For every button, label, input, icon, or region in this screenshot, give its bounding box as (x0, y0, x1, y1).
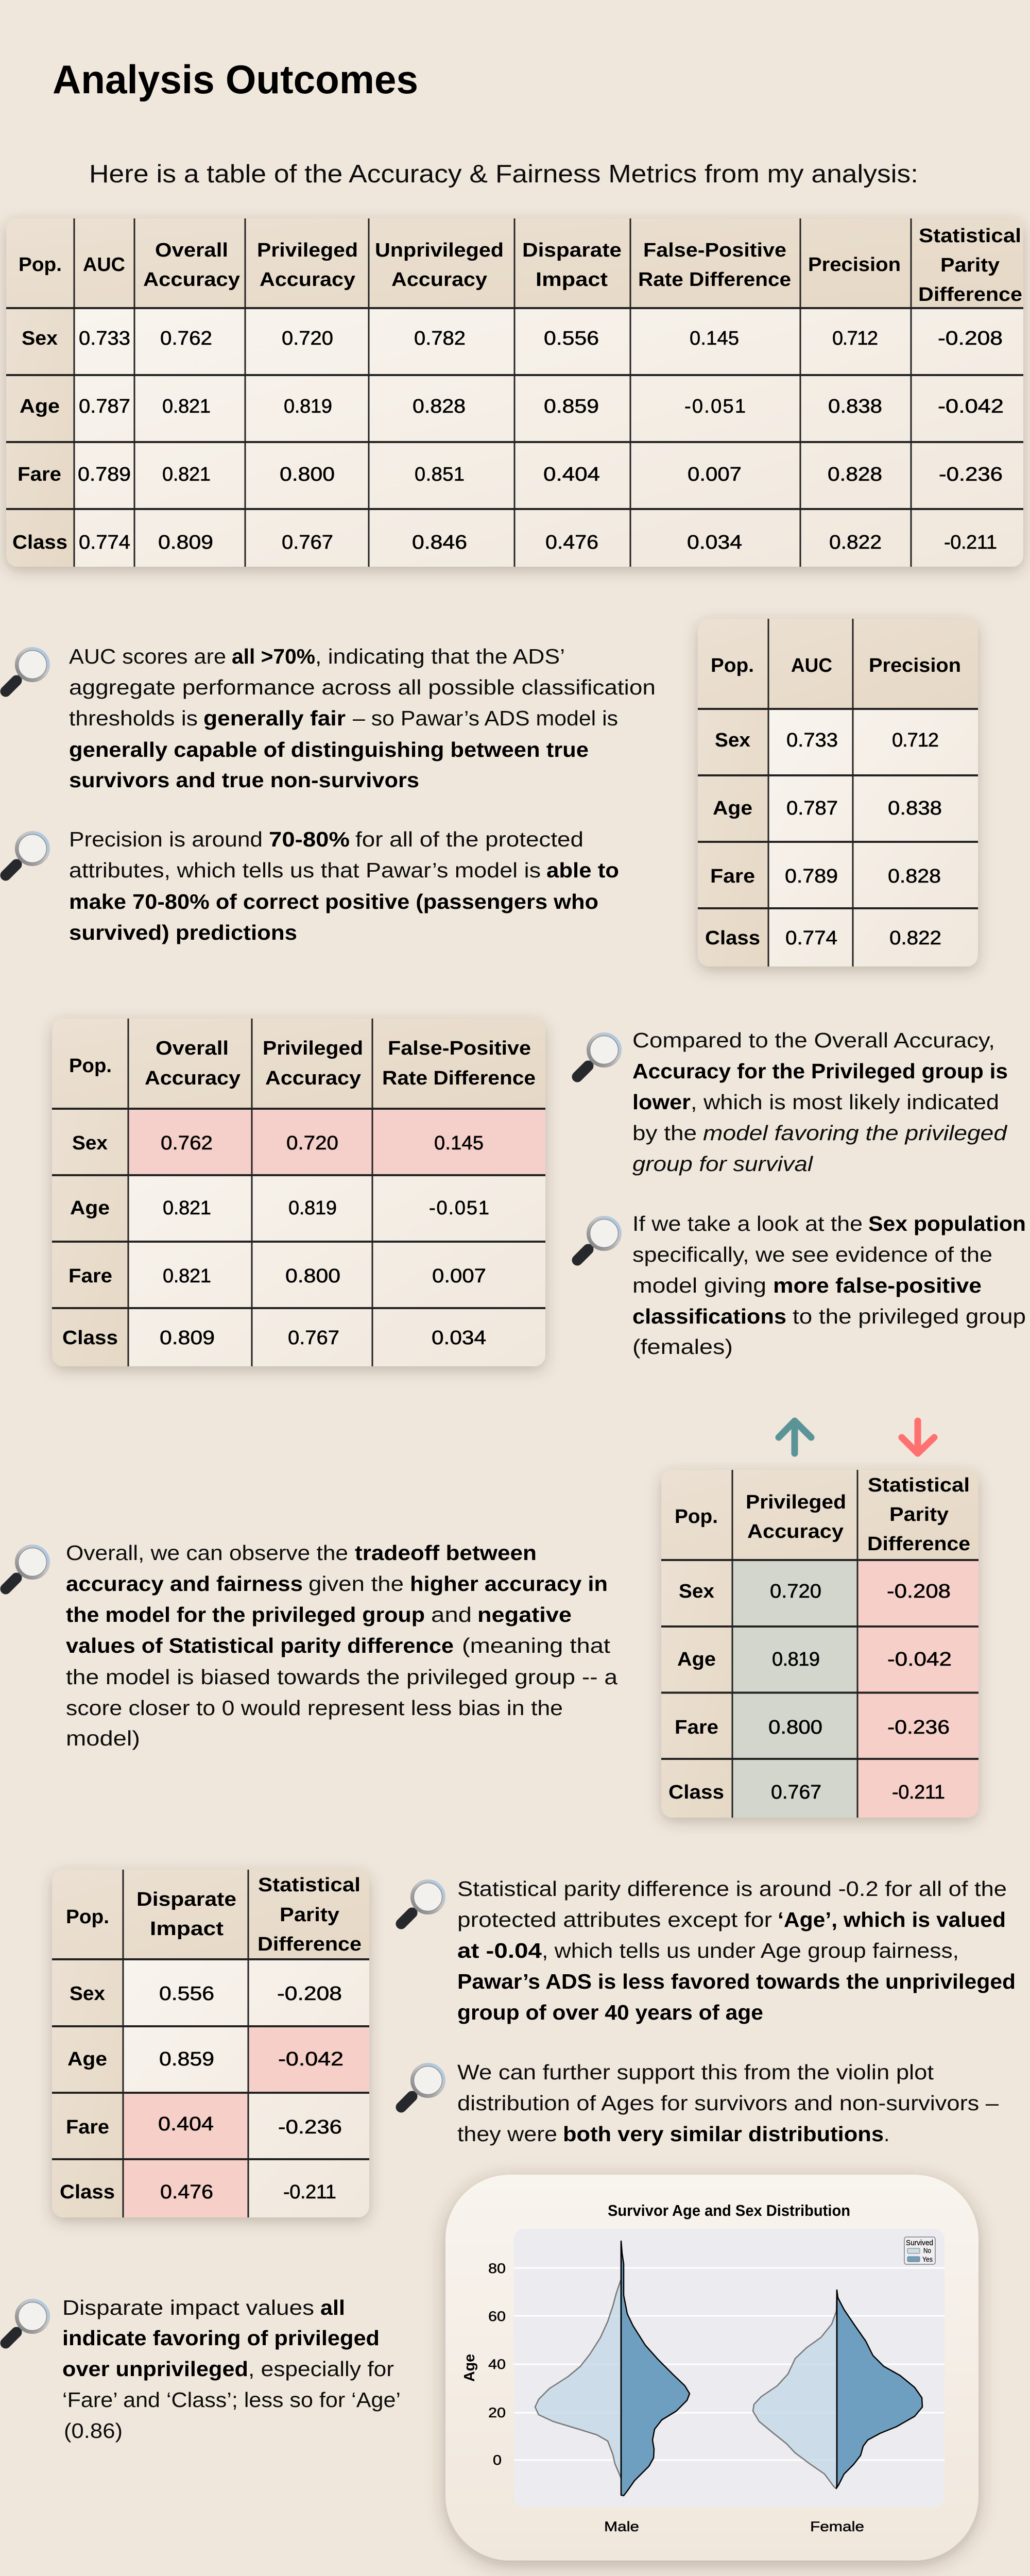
text block: disparate impact: Disparate impact values (62, 2296, 314, 2319)
table body rows: 0.800 (285, 1265, 340, 1287)
table header row: Parity (889, 1504, 949, 1526)
row: Sex: 0.720 (282, 328, 333, 349)
table header row (69, 1038, 536, 1089)
legend: Yes (922, 2255, 933, 2263)
table body rows: 0.789 (785, 866, 838, 887)
table body rows: -0.208 (887, 1581, 951, 1602)
table header row: False-Positive (388, 1038, 531, 1059)
text block: statistical parity: protected attributes except for (457, 1908, 772, 1931)
icon: magnifying glass precision (6, 833, 48, 875)
table header row: Rate Difference (382, 1067, 536, 1089)
table body rows: -0.051 (429, 1197, 489, 1219)
text block: tradeoff: the model is biased towards the privileged group -- a (66, 1665, 617, 1689)
table body rows: Fare (710, 866, 755, 887)
table header row (675, 1475, 970, 1555)
table header row: Precision (869, 655, 961, 676)
chart title: Survivor Age and Sex Distribution (608, 2201, 850, 2219)
row: Fare: 0.828 (828, 464, 882, 485)
table header row: Accuracy (260, 269, 355, 291)
table body rows: 0.145 (434, 1132, 484, 1154)
table body rows (60, 1983, 344, 2203)
row: Age: Age (20, 396, 60, 417)
table body rows: 0.712 (892, 730, 939, 751)
row: Sex: 0.762 (160, 328, 212, 349)
table body rows: -0.042 (887, 1649, 952, 1670)
y axis labels: 0 (493, 2452, 502, 2468)
table body rows: -0.042 (278, 2048, 344, 2070)
intro heading: Here is a table of the Accuracy & Fairness Metrics from my analysis: (89, 160, 918, 188)
table header row: Rate Difference (638, 269, 791, 291)
table body rows: 0.809 (160, 1327, 215, 1349)
text block: disparate impact (62, 2296, 401, 2443)
row: Age: 0.819 (284, 396, 332, 417)
table header row: Overall (156, 1038, 229, 1059)
text block: AUC scores: , indicating that the ADS’ (315, 645, 565, 668)
table body rows: 0.821 (163, 1265, 211, 1287)
table body rows: 0.819 (772, 1649, 820, 1670)
table body rows: 0.404 (158, 2113, 214, 2135)
row: Sex: Sex (22, 328, 58, 349)
row: Age: 0.787 (79, 396, 130, 417)
table body rows: 0.800 (768, 1717, 822, 1738)
text block: tradeoff: values of Statistical parity difference (66, 1634, 454, 1657)
text block: AUC scores: all >70% (232, 645, 315, 668)
table body rows: Class (705, 927, 760, 949)
y axis labels: 60 (488, 2309, 506, 2324)
text block: tradeoff: given the (308, 1572, 404, 1596)
table body rows (62, 1132, 489, 1349)
text block: AUC scores: generally capable of distinguishing between true (69, 738, 589, 761)
row: Class (12, 532, 997, 553)
table body rows: 0.556 (159, 1983, 214, 2005)
row: Sex: 0.733 (79, 328, 130, 349)
text block: privileged accuracy: Compared to the Overall Accuracy, (632, 1028, 995, 1052)
row: Age: 0.838 (828, 396, 882, 417)
table body rows: 0.787 (786, 798, 838, 819)
table header row (19, 225, 1022, 306)
table header row: Pop. (69, 1055, 112, 1077)
table header row: Accuracy (391, 269, 487, 291)
table header row: Difference (918, 284, 1022, 306)
row: Class: 0.822 (829, 532, 882, 553)
table header row: False-Positive (643, 240, 786, 261)
text block: statistical parity: group of over 40 years of age (457, 2001, 763, 2024)
row: Sex: 0.782 (414, 328, 466, 349)
text block: sex population: model giving (632, 1274, 766, 1297)
table body rows: Age (67, 2048, 107, 2070)
table header row: Overall (155, 240, 228, 261)
panel: full metrics table (6, 218, 1023, 567)
row: Fare (18, 464, 1003, 485)
text block: sex population: more false-positive (773, 1274, 982, 1297)
row: Fare: 0.007 (688, 464, 742, 485)
table body rows: 0.859 (159, 2048, 214, 2070)
table header row: Unprivileged (375, 240, 504, 261)
row: Age: 0.821 (162, 396, 211, 417)
panel: violin chart card (445, 2175, 978, 2561)
row: Age: 0.828 (413, 396, 466, 417)
text block: statistical parity: , which tells us under Age group fairness, (542, 1939, 959, 1962)
text block: Precision: 70-80% (269, 827, 350, 851)
table body rows: -0.236 (278, 2116, 342, 2138)
table body rows: 0.720 (770, 1581, 821, 1602)
panel: AUC and precision table (698, 619, 978, 967)
text block: privileged accuracy: , which is most likely indicated (691, 1090, 999, 1114)
arrow: down (902, 1421, 934, 1453)
text block: Precision: make 70-80% of correct positive (passengers who (69, 890, 598, 913)
table header row: Statistical (868, 1475, 970, 1496)
text block: AUC scores: AUC scores are (69, 645, 226, 668)
table body rows: -0.211 (892, 1782, 945, 1803)
table body rows: Fare (675, 1717, 718, 1738)
y axis labels (488, 2261, 506, 2468)
table body rows: -0.236 (887, 1717, 950, 1738)
row: Class: Class (12, 532, 67, 553)
row: Fare: 0.789 (78, 464, 131, 485)
panel: privileged accuracy and parity table (661, 1470, 978, 1818)
row: Class: 0.476 (545, 532, 598, 553)
text block: tradeoff: higher accuracy in (410, 1572, 608, 1596)
x axis labels: Male (604, 2519, 639, 2534)
table header row: Accuracy (143, 269, 240, 291)
row: Class: 0.774 (79, 532, 130, 553)
text block: sex population (632, 1212, 1026, 1359)
text block: AUC scores: – so Pawar’s ADS model is (353, 706, 618, 730)
table body rows: Class (60, 2181, 115, 2203)
x axis labels: Female (810, 2519, 864, 2534)
table body rows: Sex (679, 1581, 714, 1602)
row: Sex: -0.208 (938, 328, 1003, 349)
table header row: Pop. (711, 655, 754, 676)
table body rows: -0.208 (277, 1983, 342, 2005)
row: Sex: 0.712 (832, 328, 878, 349)
text block: Precision: for all of the protected (355, 827, 583, 851)
text block: statistical parity: at -0.04 (457, 1939, 542, 1962)
row: Fare: 0.851 (415, 464, 465, 485)
table header row: Parity (280, 1904, 339, 1926)
text block: privileged accuracy: model favoring the privileged (703, 1121, 1007, 1145)
arrow: up (779, 1421, 811, 1453)
violin: male not survived (535, 2279, 621, 2478)
text block: tradeoff: model) (66, 1726, 140, 1750)
text block: privileged accuracy: lower (632, 1090, 691, 1114)
table body rows: 0.819 (288, 1197, 337, 1219)
table header row: Accuracy (145, 1067, 241, 1089)
violin plot area (514, 2229, 945, 2507)
table body rows: Sex (70, 1983, 105, 2005)
icon: magnifying glass overall accuracy (577, 1034, 620, 1077)
table body rows: 0.720 (286, 1132, 338, 1154)
row: Fare: 0.404 (543, 464, 600, 485)
table header row: Difference (867, 1533, 970, 1555)
text block: disparate impact: all (320, 2296, 345, 2319)
row: Fare: 0.821 (162, 464, 211, 485)
legend: Survived (906, 2239, 933, 2247)
row: Class: 0.767 (282, 532, 333, 553)
table body rows: Age (677, 1649, 716, 1670)
row: Age: -0.042 (938, 396, 1004, 417)
text block: sex population: specifically, we see evidence of the (632, 1243, 992, 1266)
table body rows: 0.774 (785, 927, 837, 949)
icon: magnifying glass violin (401, 2064, 444, 2107)
row: Sex: 0.145 (690, 328, 739, 349)
text block: statistical parity: ‘Age’, which is valued (778, 1908, 1006, 1931)
table header row: Statistical (258, 1874, 360, 1896)
table body rows: 0.838 (888, 798, 942, 819)
icon: magnifying glass statistical parity (401, 1881, 444, 1924)
table body rows: 0.767 (288, 1327, 339, 1349)
text block: violin plot (457, 2060, 999, 2146)
table header row (711, 655, 961, 676)
table header row: Parity (940, 255, 1000, 276)
icon: magnifying glass disparate impact (6, 2300, 48, 2343)
text block: privileged accuracy: group for survival (632, 1152, 814, 1176)
row: Class: 0.034 (687, 532, 742, 553)
text block: tradeoff: accuracy and fairness (66, 1572, 303, 1596)
text block: violin plot: We can further support this from the violin plot (457, 2060, 934, 2084)
text block: AUC scores: generally fair (203, 706, 346, 730)
table header row: Pop. (66, 1906, 109, 1928)
text block: sex population: (females) (632, 1335, 733, 1359)
text block: disparate impact: over unprivileged (62, 2357, 248, 2381)
text block: Precision (69, 827, 619, 944)
x axis labels (604, 2519, 864, 2534)
y axis title: Age (461, 2354, 478, 2382)
text block: sex population: Sex population (868, 1212, 1026, 1235)
panel: disparate impact and parity table (52, 1870, 369, 2217)
legend (904, 2237, 935, 2264)
violin: male survived (621, 2241, 690, 2496)
row: Fare: Fare (18, 464, 61, 485)
table body rows: 0.822 (889, 927, 941, 949)
text block: tradeoff: score closer to 0 would represent less bias in the (66, 1696, 563, 1720)
text block: statistical parity: Statistical parity difference is around -0.2 for all of the (457, 1877, 1007, 1901)
text block: disparate impact: indicate favoring of privileged (62, 2326, 380, 2350)
table header row (66, 1874, 362, 1955)
table header row: Difference (258, 1934, 362, 1955)
text block: violin plot: both very similar distributions (563, 2122, 884, 2146)
row: Fare: 0.800 (280, 464, 335, 485)
text block: tradeoff: tradeoff between (355, 1541, 537, 1565)
text block: tradeoff: negative (477, 1603, 572, 1626)
text block: statistical parity: Pawar’s ADS is less favored towards the unprivileged (457, 1970, 1016, 1993)
legend: No (923, 2246, 931, 2255)
table body rows: 0.476 (160, 2181, 213, 2203)
table body rows: 0.007 (432, 1265, 486, 1287)
table body rows: 0.034 (432, 1327, 486, 1349)
text block: violin plot: distribution of Ages for survivors and non-survivors – (457, 2091, 999, 2115)
text block: sex population: If we take a look at the (632, 1212, 863, 1235)
table body rows: 0.733 (786, 730, 838, 751)
text block: privileged accuracy (632, 1028, 1008, 1176)
table header row: Disparate (522, 240, 622, 261)
table body rows: Fare (66, 2116, 109, 2138)
table header row: Impact (150, 1918, 224, 1940)
table body rows: 0.767 (771, 1782, 821, 1803)
table header row: AUC (83, 254, 125, 276)
row: Fare: -0.236 (939, 464, 1003, 485)
text block: Precision: attributes, which tells us that Pawar’s model is (69, 858, 541, 882)
row: Class: 0.846 (412, 532, 467, 553)
text block: statistical parity (457, 1877, 1016, 2024)
text block: sex population: classifications (632, 1304, 786, 1328)
text block: privileged accuracy: Accuracy for the Privileged group is (632, 1059, 1008, 1083)
text block: privileged accuracy: by the (632, 1121, 697, 1145)
table header row: AUC (791, 655, 832, 676)
text block: tradeoff: (meaning that (462, 1634, 611, 1657)
text block: tradeoff: and (431, 1603, 472, 1626)
table body rows: Sex (715, 730, 750, 751)
table body rows: Class (62, 1327, 118, 1349)
table header row: Privileged (746, 1492, 846, 1513)
text block: disparate impact: ‘Fare’ and ‘Class’; less so for ‘Age’ (62, 2388, 401, 2412)
icon: magnifying glass sex population (577, 1217, 620, 1260)
panel: accuracy and false-positive table (52, 1019, 545, 1366)
text block: AUC scores: survivors and true non-survivors (69, 768, 419, 792)
text block: AUC scores: thresholds is (69, 706, 198, 730)
row: Age: -0.051 (684, 396, 746, 417)
text block: violin plot: they were (457, 2122, 557, 2146)
text block: disparate impact: (0.86) (64, 2419, 123, 2443)
text block: tradeoff: the model for the privileged group (66, 1603, 425, 1626)
icon: magnifying glass tradeoff (6, 1546, 48, 1589)
table body rows: Sex (72, 1132, 108, 1154)
table header row: Accuracy (265, 1067, 361, 1089)
table header row: Privileged (257, 240, 358, 261)
table header row: Statistical (919, 225, 1021, 247)
row: Age (20, 396, 1004, 417)
table header row: Pop. (19, 254, 62, 276)
table body rows: 0.821 (163, 1197, 211, 1219)
y axis labels: 20 (488, 2405, 506, 2420)
row: Age: 0.859 (544, 396, 599, 417)
table body rows (705, 730, 942, 949)
table body rows: Age (70, 1197, 110, 1219)
text block: sex population: to the privileged group (793, 1304, 1026, 1328)
row: Sex: 0.556 (544, 328, 599, 349)
text block: AUC scores: aggregate performance across all possible classification (69, 675, 656, 699)
table body rows: -0.211 (283, 2181, 336, 2203)
table header row: Pop. (675, 1506, 718, 1528)
table body rows: Age (713, 798, 752, 819)
text block: violin plot: . (884, 2122, 889, 2146)
text block: Precision: survived) predictions (69, 921, 297, 944)
table body rows: 0.762 (161, 1132, 213, 1154)
y axis labels: 40 (488, 2357, 506, 2372)
table header row: Accuracy (747, 1521, 844, 1543)
text block: AUC scores (69, 645, 656, 792)
title: Analysis Outcomes (53, 57, 418, 102)
table header row: Privileged (263, 1038, 363, 1059)
violin: female not survived (753, 2290, 837, 2488)
text block: tradeoff (66, 1541, 617, 1750)
icon: magnifying glass AUC (6, 649, 48, 691)
table body rows: Fare (68, 1265, 112, 1287)
table header row: Precision (808, 254, 901, 276)
violin: female survived (836, 2290, 922, 2488)
y axis labels: 80 (488, 2261, 506, 2276)
table header row: Impact (536, 269, 608, 291)
text block: Precision: able to (546, 858, 619, 882)
row: Class: 0.809 (158, 532, 213, 553)
text block: tradeoff: Overall, we can observe the (66, 1541, 348, 1565)
text block: Precision: Precision is around (69, 827, 263, 851)
table header row: Disparate (136, 1889, 236, 1910)
table body rows (668, 1581, 952, 1803)
table body rows: 0.828 (888, 866, 941, 887)
text block: disparate impact: , especially for (248, 2357, 394, 2381)
row: Class: -0.211 (944, 532, 997, 553)
row: Sex (22, 328, 1003, 349)
table body rows: Class (668, 1782, 724, 1803)
